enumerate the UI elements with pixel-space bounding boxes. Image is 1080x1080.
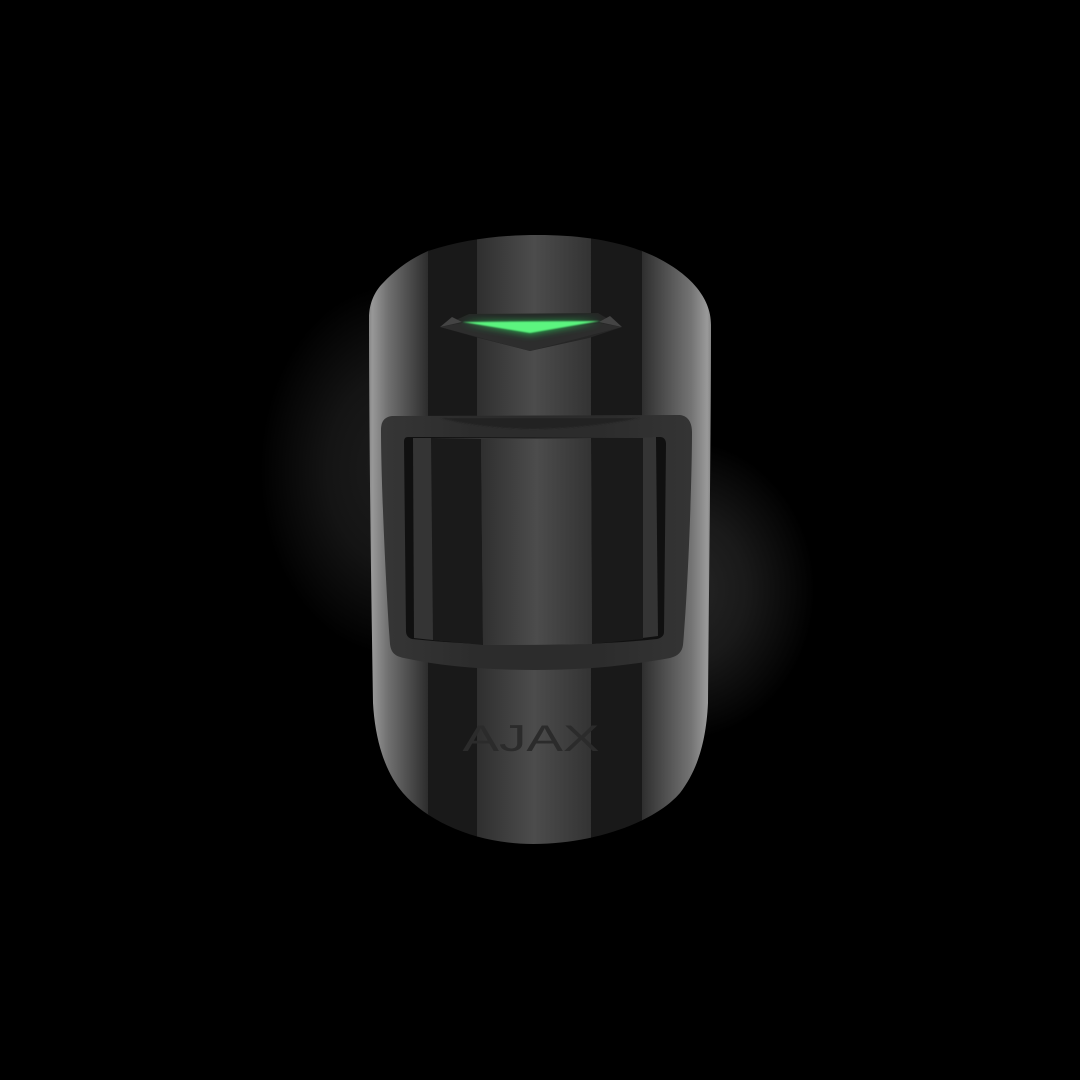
body: right glossy side: [641, 250, 711, 821]
detector body: [366, 230, 713, 850]
body: right dark reflection: [590, 230, 642, 850]
LED glow: [462, 321, 600, 334]
LED housing: left facet: [440, 317, 462, 327]
lens window interior: [413, 437, 658, 645]
product illustration: motion detector: [288, 235, 793, 844]
lens frame: top shading: [440, 418, 640, 429]
lens window base: [404, 437, 666, 645]
background glow: left: [260, 285, 530, 655]
body: left glossy side: [369, 250, 429, 815]
lens frame outer: [381, 415, 692, 670]
logo: AJAX: AJAX: [462, 718, 600, 759]
LED housing: [440, 313, 622, 351]
lens: left dark stripe: [431, 438, 483, 645]
LED housing: right facet: [599, 316, 622, 327]
background glow: right: [545, 440, 815, 740]
LED light: [462, 321, 600, 333]
lens: centre highlight: [481, 439, 592, 645]
LED housing: lower lip: [440, 323, 622, 351]
body: centre highlight: [477, 230, 591, 850]
lens: right dark stripe: [591, 438, 643, 644]
PIR lens frame: [381, 415, 692, 670]
LED recess: [440, 313, 622, 351]
body: left dark reflection: [428, 230, 478, 850]
